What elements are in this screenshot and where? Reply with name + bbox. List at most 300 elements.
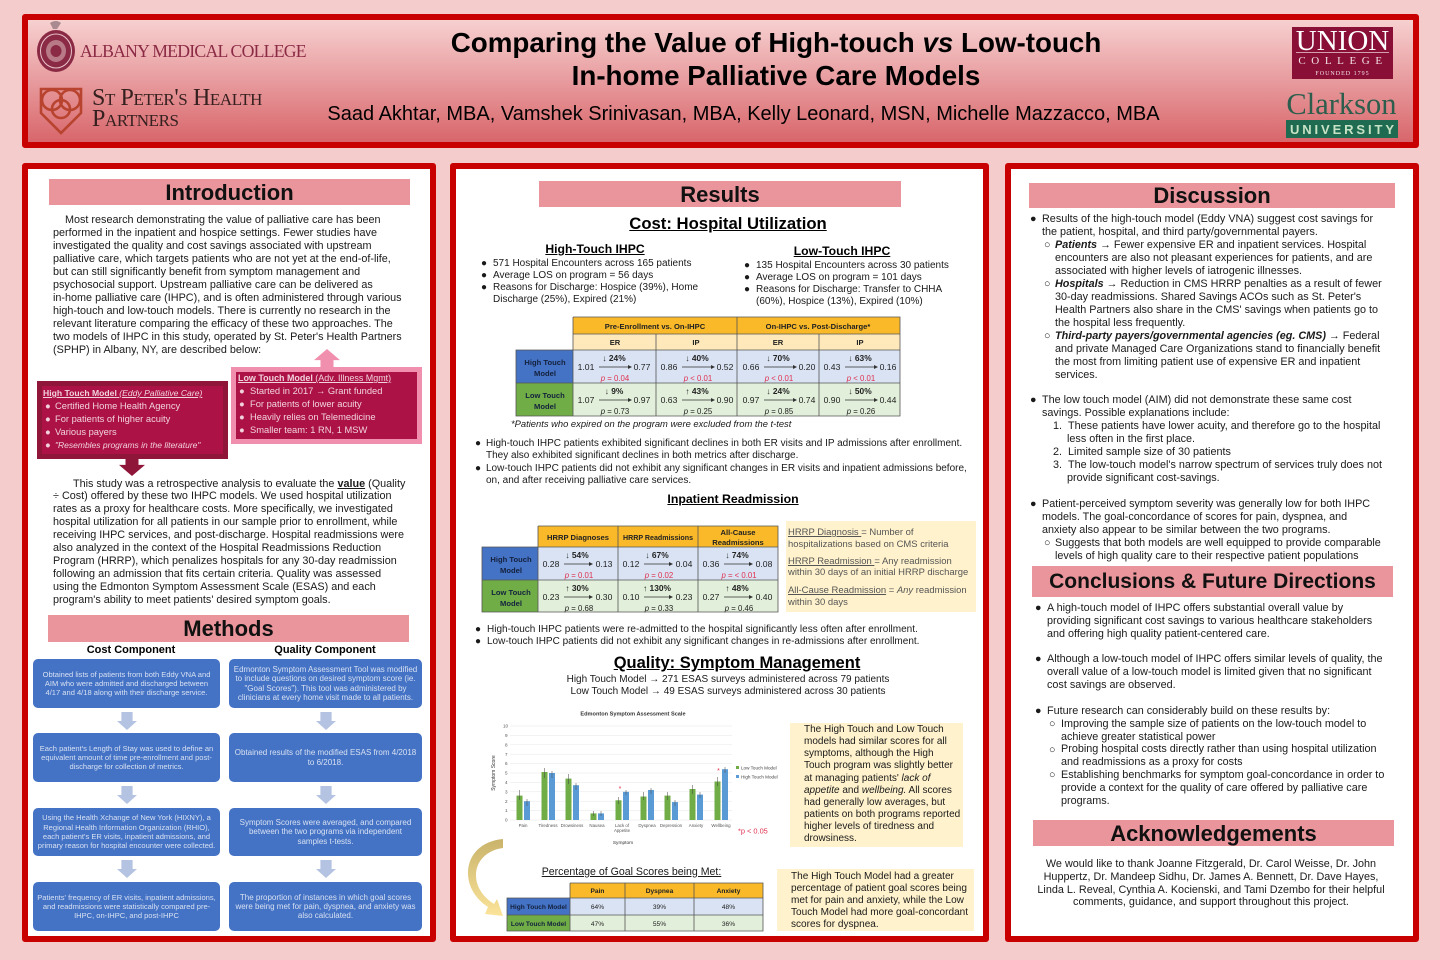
logo: Union College: FOUNDED 1795 [1315,71,1370,77]
subheading: high-touch IHPC: High-Touch IHPC [545,242,645,256]
flow step: quality 2 [229,733,422,782]
bullets: discussion of high-touch savings: the most from limiting patient use of expensive ER and inpatient [1055,356,1360,368]
heading: Introduction [49,179,410,205]
heading: Acknowledgements: Acknowledgements [1110,821,1317,846]
flow step: cost 2: Each patient's Length of Stay was used to define an [40,744,213,753]
heading: Methods: Methods [183,616,274,641]
table: hospital utilization [516,316,900,416]
text: introduction paragraph two [53,478,406,606]
logo: Albany Medical College [37,21,306,72]
bullets: low-touch explanations: The low touch model (AIM) did not demonstrate these same cost [1042,394,1352,406]
flow step: cost 2: equivalent amount of time pre-enrollment and post- [41,753,212,762]
arrow: quality 3 to 4 [316,860,336,878]
text: introduction paragraph one: relevant literature comparing the efficacy of these two approaches. The [53,318,393,330]
text: acknowledgements: We would like to thank Joanne Fitzgerald, Dr. Carol Weisse, Dr. John [1046,858,1376,870]
callout: symptom score interpretation: Touch program was slightly better [804,760,953,771]
callout: low touch model: ● [239,386,245,396]
bullets: discussion of high-touch savings: ● [1030,213,1037,225]
callout: readmission definitions: hospitalizations based on CMS criteria [788,538,949,550]
flow step: quality 3: between the two programs via independent [249,827,402,836]
table: readmissions: Low Touch [491,588,531,597]
callout: high touch model: "Resembles programs in the literature" [55,440,200,450]
text: acknowledgements: Linda L. Reveal, Cynthia A. Kocienski, and Tami Dzembo for their helpful [1037,884,1385,896]
bullets: low-touch value: Although a low-touch model of IHPC offers similar levels of quality, the [1047,653,1383,665]
table: goal scores met [506,882,764,932]
table: goal scores met: 48% [722,904,735,911]
table: readmissions: p = 0.46 [724,604,753,613]
text: introduction paragraph one: (SPHP) in Albany, NY, are described below: [53,344,261,356]
bullets: future research: ○ [1049,769,1056,781]
table: hospital utilization: ↓ 63% [848,353,872,363]
bullets: low-touch explanations: provide significant cost-savings. [1067,472,1220,484]
title [451,27,1101,91]
panel: results [450,163,989,942]
flow step: quality 1: "Goal Scores"). This tool was administered by [244,684,407,692]
bullets: discussion of high-touch savings: the hospital less frequently. [1055,317,1185,329]
arrow: quality 2 to 3 [316,786,336,804]
bullets: readmission findings: Low-touch IHPC patients did not exhibit any significant changes in re-admissions after enrollment. [487,636,919,647]
heading: Conclusions and Future Directions [1032,566,1393,597]
flow step: cost 2: discharge for collection of metrics. [69,762,184,771]
callout: low touch model: Smaller team: 1 RN, 1 MSW [250,425,367,435]
flow step: cost 1: Obtained lists of patients from both Eddy VNA and [43,670,210,679]
logo: St Peter's Health Partners: Partners [92,106,179,132]
bullets: high-touch facts [481,258,698,305]
callout: low touch model: For patients of lower acuity [250,399,362,409]
flow step: cost 4: Patients' frequency of ER visits, inpatient admissions, [37,893,216,902]
bar chart: Edmonton Symptom Assessment Scale: 5 [505,771,508,776]
bullets: symptom severity: levels of high quality care to their respective patient populations [1055,550,1359,562]
table: readmissions: 0.40 [756,592,773,602]
bullets: low-touch facts [744,260,949,307]
bullets: high-touch facts: Reasons for Discharge: Hospice (39%), Home [493,282,698,293]
table: goal scores met: Pain [591,888,604,895]
flow step: cost 3: primary reason for hospital encounter were collected. [38,841,215,850]
callout: high touch model: For patients of higher acuity [55,414,170,424]
table: hospital utilization: IP [856,338,864,347]
table: hospital utilization: 1.07 [578,395,595,405]
callout: low touch model: ● [239,399,245,409]
subheading: cost hospital utilization: Cost: Hospital Utilization [629,214,827,233]
bullets: utilization findings: on, and after receiving palliative care services. [486,475,691,486]
table: hospital utilization: ↓ 70% [766,353,790,363]
bullets: future research: and readmissions as a proxy for costs [1061,756,1242,768]
table: hospital utilization: ↓ 50% [848,386,872,396]
bullets: future research: provide a context for the quality of care offered by palliative care [1061,782,1367,794]
subheading: inpatient readmission: Inpatient Readmission [667,492,799,506]
bullets: symptom severity: anxiety also appear to be similar between the two programs. [1042,524,1330,536]
bar chart: Edmonton Symptom Assessment Scale: Depression [660,823,683,828]
logo: Union College [1292,25,1393,79]
callout: low touch model: Started in 2017 → Grant funded [250,386,382,396]
callout: readmission definitions: HRRP Readmission = Any readmission [788,556,952,566]
bar chart: Edmonton Symptom Assessment Scale: Edmonton Symptom Assessment Scale [580,712,686,718]
bullets: future research: Improving the sample size of patients on the low-touch model to [1061,718,1366,730]
table: goal scores met: 55% [653,921,666,928]
bullets: discussion of high-touch savings: Third-party payers/governmental agencies (eg. CMS) → Federal [1055,330,1379,342]
table: readmissions: 0.36 [703,559,720,569]
table: goal scores met: High Touch Model [510,904,567,911]
table: hospital utilization: 0.90 [824,395,841,405]
callout: high touch model: ● [45,440,51,450]
subheading: quality symptom management: Quality: Symptom Management [614,654,860,672]
text: ESAS survey counts [567,674,889,697]
bar chart: Edmonton Symptom Assessment Scale: * [619,786,622,793]
bullets: low-touch value [1035,653,1383,691]
bar chart: Edmonton Symptom Assessment Scale: 7 [505,752,508,757]
callout: readmission definitions: within 30 days [788,596,848,608]
panel: left column [22,163,436,942]
table: hospital utilization: ER [610,338,621,347]
table: readmissions: All-Cause [720,528,756,537]
table: hospital utilization: p < 0.01 [764,374,793,383]
table: readmissions: Model [500,599,522,608]
bullets: low-touch facts: (60%), Hospice (13%), Expired (10%) [756,296,923,307]
flow step: cost 3: each patient's ER visits, inpatient admissions, and [43,832,210,841]
table: hospital utilization: Model [534,402,556,411]
bar chart: Edmonton Symptom Assessment Scale: 4 [505,780,508,785]
header banner [22,14,1419,148]
heading: Methods [48,615,409,642]
note: t-test exclusion: *Patients who expired on the program were excluded from the t-test [511,418,791,429]
callout: readmission definitions: All-Cause Readmission = Any readmission [788,585,967,596]
text: ESAS survey counts: High Touch Model → 271 ESAS surveys administered across 79 patients [567,674,889,684]
flow step: cost 4 [33,882,220,931]
text: introduction paragraph one: two models of IHPC in this study, operated by St. Peter's Health Partners [53,330,402,342]
callout: symptom score interpretation: symptoms, although the High [804,748,934,759]
table: hospital utilization: 0.66 [743,362,760,372]
bar chart: Edmonton Symptom Assessment Scale: Tiredness [538,823,558,828]
callout: low touch model: Low Touch Model (Adv. Illness Mgmt) [238,373,391,383]
flow step: quality 1: clinicians at every home visit made to all patients. [238,693,413,702]
arrow: cost 3 to 4 [117,860,137,878]
table: hospital utilization: 0.43 [824,362,841,372]
bullets: future research: Establishing benchmarks for symptom goal-concordance in order to [1061,769,1384,781]
bullets: low-touch facts: 135 Hospital Encounters across 30 patients [756,260,949,271]
bullets: future research [1035,705,1384,807]
bar chart: Edmonton Symptom Assessment Scale: Low Touch Model [741,766,777,770]
bar chart: Edmonton Symptom Assessment Scale: Drowsiness [561,823,584,828]
bullets: conclusions: ● [1035,602,1042,614]
table: readmissions: ↑ 30% [565,583,589,593]
callout: goal score interpretation: percentage of patient goal scores being [791,883,967,894]
flow step: quality 4: The proportion of instances in which goal scores [240,893,411,902]
bullets: conclusions: providing significant cost savings to various healthcare stakeholders [1047,615,1372,627]
table: readmissions: ↑ 48% [725,583,749,593]
text: introduction paragraph two: rates as a proxy for healthcare costs. More specifically, we investigated [53,503,393,515]
bar chart: Edmonton Symptom Assessment Scale: 0 [505,818,508,823]
callout: symptom score interpretation: at managing patients' lack of [804,773,930,784]
bullets: future research: programs. [1061,795,1110,807]
logo: Clarkson University: UNIVERSITY [1290,122,1394,137]
text: introduction paragraph one: psychosocial support. Upstream palliative care can be delivered as [53,278,373,290]
callout: low touch model: Heavily relies on Telemedicine [250,412,376,422]
bar chart: Edmonton Symptom Assessment Scale [491,712,778,846]
callout: symptom score interpretation: The High Touch and Low Touch [804,724,944,735]
table: hospital utilization: On-IHPC vs. Post-Discharge* [766,322,870,331]
arrow: curved link from chart to goal table [468,839,503,916]
table: hospital utilization: 0.20 [799,362,816,372]
bar chart: Edmonton Symptom Assessment Scale: 10 [503,724,509,728]
logo: St Peter's Health Partners [40,85,262,135]
bar chart: Edmonton Symptom Assessment Scale: 6 [505,761,508,766]
table: hospital utilization: Pre-Enrollment vs. On-IHPC [605,322,706,331]
bullets: high-touch facts: Discharge (25%), Expired (21%) [493,294,636,305]
logo: St Peter's Health Partners: St Peter's Health [92,85,262,111]
bullets: discussion of high-touch savings: Hospitals → Reduction in CMS HRRP penalties as a result of fewer [1055,278,1382,290]
callout: symptom score interpretation: appetite and wellbeing. All scores [804,785,952,796]
callout: high touch model: Various payers [55,427,117,437]
table: hospital utilization: p = 0.26 [846,407,875,416]
table: hospital utilization: 0.97 [634,395,651,405]
callout: symptom score interpretation: had generally low averages, but [804,797,945,808]
text: introduction paragraph one: high-touch and low-touch models. There is currently no research in the [53,304,391,316]
subheading: quality component: Quality Component [274,644,376,656]
table: readmissions: 0.28 [543,559,560,569]
callout: high touch model: ● [45,414,51,424]
callout: symptom score interpretation: drowsiness. [804,833,857,844]
bullets: readmission findings: ● [475,624,481,635]
table: hospital utilization: p = 0.73 [600,407,629,416]
text: introduction paragraph two: following an admission that fits certain criteria. Quality was assessed [53,568,381,580]
table: hospital utilization: 0.90 [717,395,734,405]
heading: Results: Results [680,182,760,207]
bullets: low-touch explanations: less often in the first place. [1067,433,1195,445]
bullets: low-touch explanations: 3. The low-touch model's narrow spectrum of services truly does not [1053,459,1382,471]
table: hospital utilization: 0.77 [634,362,651,372]
heading: Introduction: Introduction [165,180,294,205]
bar chart: Edmonton Symptom Assessment Scale: Nausea [589,823,605,828]
bullets: symptom severity: Patient-perceived symptom severity was generally low for both IHPC [1042,498,1370,510]
table: readmissions: 0.12 [623,559,640,569]
bullets: high-touch facts: ● [481,270,487,281]
callout: low touch model: ● [239,412,245,422]
table: goal scores met: Low Touch Model [511,921,566,928]
table: hospital utilization: ↓ 24% [766,386,790,396]
callout: symptom score interpretation: models had similar scores for all [804,736,947,747]
logo: Union College: COLLEGE [1298,55,1388,67]
table: readmissions: HRRP Readmissions [623,534,693,542]
bullets: discussion of high-touch savings: the patient, hospital, and third party/governmental payers. [1042,226,1318,238]
table: readmissions [482,526,778,613]
bullets: conclusions: A high-touch model of IHPC offers substantial overall value by [1047,602,1343,614]
bullets: utilization findings: Low-touch IHPC patients did not exhibit any significant changes in ER visits and inpatient admissions before, [486,463,967,474]
table: readmissions: 0.13 [596,559,613,569]
flow step: cost 3: Regional Health Information Organization (RHIO), [43,823,210,832]
subheading: cost component: Cost Component [87,644,175,656]
table: readmissions: p = 0.01 [564,571,593,580]
table: hospital utilization: High Touch [524,358,566,367]
bullets: low-touch value: ● [1035,653,1042,665]
bullets: high-touch facts: 571 Hospital Encounters across 165 patients [493,258,691,268]
flow step: cost 4: and readmissions were statistically compared pre- [43,902,210,911]
table: hospital utilization: p = 0.25 [683,407,713,416]
bullets: utilization findings [475,438,967,486]
text: introduction paragraph one: in-home palliative care (IHPC), and is often administered through various [53,292,402,304]
flow step: quality 1: Edmonton Symptom Assessment Tool was modified [234,665,417,674]
table: hospital utilization: 0.16 [880,362,897,372]
bar chart: Edmonton Symptom Assessment Scale: Pain [519,823,528,828]
table: readmissions: 0.10 [623,592,640,602]
bullets: symptom severity: Suggests that both models are well equipped to provide comparable [1055,537,1381,549]
table: hospital utilization: ↓ 24% [602,353,626,363]
flow step: quality 2: to 6/2018. [308,758,343,766]
text: introduction paragraph two: program's ability to meet patients' desired symptom goals. [53,594,331,606]
text: introduction paragraph one: Most research demonstrating the value of palliative care has been [65,214,381,226]
table: hospital utilization: 0.44 [880,395,897,405]
table: readmissions: High Touch [490,555,532,564]
logo: Albany Medical College: ALBANY MEDICAL COLLEGE [80,41,306,61]
table: hospital utilization: 0.63 [661,395,678,405]
callout: goal score interpretation: scores for dyspnea. [791,919,879,930]
table: readmissions: Model [500,566,522,575]
text: introduction paragraph two: receiving IHPC services, and post-discharge. Hospital readmissions were [53,529,404,541]
table: readmissions: p = < 0.01 [720,571,757,580]
bullets: low-touch facts: ● [744,260,750,271]
bullets: low-touch facts: ● [744,272,750,283]
text: introduction paragraph two: Program (HRRP), which penalizes hospitals for any 30-day readmission [53,555,397,567]
flow step: quality 4: also calculated. [298,911,353,920]
bullets: readmission findings [475,624,919,647]
callout: symptom score interpretation: higher levels of tiredness and [804,821,934,832]
callout: goal score interpretation: The High Touch Model had a greater [791,870,954,882]
text: introduction paragraph one: palliative care, which targets patients who are not yet at the end-of-life, [53,252,391,264]
bullets: discussion of high-touch savings: Health Partners also share in the CMS' savings when patients go to [1055,304,1378,316]
table: readmissions: 0.04 [676,559,693,569]
bullets: low-touch explanations: savings. Possible explanations include: [1042,407,1230,419]
arrow: low touch up [314,349,340,367]
table: readmissions: 0.23 [543,592,560,602]
table: readmissions: 0.23 [676,592,693,602]
table: readmissions: HRRP Diagnoses [547,533,609,542]
table: goal scores met: 64% [591,904,604,911]
bullets: high-touch facts: ● [481,282,487,293]
callout: goal score interpretation: Touch Model had more goal-concordant [791,907,968,918]
table: hospital utilization: 0.52 [717,362,734,372]
heading: Conclusions and Future Directions: Conclusions & Future Directions [1049,570,1376,593]
text: acknowledgements: comments, guidance, and support throughout this project. [1073,896,1349,908]
callout: high touch model: Certified Home Health Agency [55,401,180,411]
table: goal scores met: 36% [722,921,735,928]
bullets: discussion of high-touch savings: associated with higher levels of iatrogenic illnesses. [1055,265,1302,277]
bullets: utilization findings: High-touch IHPC patients exhibited significant declines in both ER visits and IP admissions after enrollment. [486,438,962,449]
table: readmissions: ↓ 54% [565,550,589,560]
callout: high touch model: ● [45,401,51,411]
bullets: readmission findings: ● [475,636,481,647]
text: introduction paragraph one: performed in the inpatient and hospice settings. Fewer studies have [53,226,377,238]
bar chart: Edmonton Symptom Assessment Scale: Symptom [613,840,633,846]
logo: Clarkson University [1286,87,1398,138]
table: readmissions: ↓ 74% [725,550,749,560]
text: introduction paragraph one: but can still significantly benefit from symptom management and [53,266,360,278]
table: hospital utilization: ↓ 9% [605,386,624,396]
bullets: conclusions [1035,602,1372,640]
authors: Saad Akhtar, MBA, Vamshek Srinivasan, MBA, Kelly Leonard, MSN, Michelle Mazzacco, MBA [327,102,1160,124]
bar chart: Edmonton Symptom Assessment Scale: 9 [505,733,508,738]
callout: symptom score interpretation [790,723,963,847]
callout: readmission definitions [786,521,976,612]
table: hospital utilization: 0.97 [743,395,760,405]
bar chart: Edmonton Symptom Assessment Scale: *p < 0.05 [738,826,768,836]
text: acknowledgements: Huppertz, Dr. Mandeep Sidhu, Dr. James A. Bennett, Dr. Dave Hayes, [1044,871,1378,883]
table: hospital utilization: Low Touch [525,391,565,400]
bullets: low-touch explanations: 2. Limited sample size of 30 patients [1053,446,1231,458]
table: goal scores met: 47% [591,921,604,928]
bar chart: Edmonton Symptom Assessment Scale: 3 [505,789,508,794]
title: In-home Palliative Care Models [572,60,980,91]
bullets: low-touch value: overall value of a low-touch model is limited given that no significant [1047,666,1372,678]
callout: low touch model [231,367,422,444]
bar chart: Edmonton Symptom Assessment Scale: Dyspnea [638,823,656,828]
callout: readmission definitions: HRRP Diagnosis = Number of [788,527,913,538]
table: readmissions: p = 0.02 [644,571,673,580]
flow step: quality 1 [229,659,422,708]
table: readmissions: Readmissions [712,538,764,547]
table: readmissions: p = 0.68 [564,604,593,613]
flow step: quality 3: samples t-tests. [297,837,354,846]
flow step: quality 4: were being met for pain, dyspnea, and anxiety was [235,902,416,911]
bar chart: Edmonton Symptom Assessment Scale: 1 [505,808,508,813]
callout: readmission definitions: within 30 days of an initial HRRP discharge [788,567,968,578]
text: introduction paragraph one [53,214,402,356]
callout: high touch model: ● [45,427,51,437]
logo: Clarkson University: Clarkson [1286,87,1397,121]
subheading: percentage of goal scores: Percentage of Goal Scores being Met: [542,866,721,878]
callout: low touch model: ● [239,425,245,435]
table: readmissions: ↑ 130% [643,583,672,593]
subheading: low-touch IHPC: Low-Touch IHPC [794,244,890,258]
bullets: utilization findings: ● [475,463,481,474]
bar chart: Edmonton Symptom Assessment Scale: * [717,768,720,775]
bar chart: Edmonton Symptom Assessment Scale: Symptom Score [491,755,497,791]
bullets: discussion of high-touch savings: 30-day readmissions. Shared Savings ACOs such as St. Peter's [1055,291,1361,303]
text: acknowledgements [1037,858,1385,908]
bullets: low-touch facts: Reasons for Discharge: Transfer to CHHA [756,284,942,295]
arrow: cost 1 to 2 [117,712,137,730]
bullets: discussion of high-touch savings: ○ [1044,278,1051,290]
heading: Results [539,181,901,207]
flow step: cost 1: 4/17 and 4/18 along with their discharge service. [46,688,207,697]
bullets: future research: Probing hospital costs directly rather than using hospital utilization [1061,743,1377,755]
text: introduction paragraph two: also analyzed in the context of the Hospital Readmissions Reduction [53,542,381,554]
bullets: discussion of high-touch savings: Patients → Fewer expensive ER and inpatient services. Hospital [1055,239,1366,251]
text: ESAS survey counts: Low Touch Model → 49 ESAS surveys administered across 30 patients [571,686,885,697]
arrow: quality 1 to 2 [316,712,336,730]
table: hospital utilization: ↑ 43% [685,386,709,396]
heading: Discussion: Discussion [1153,183,1271,208]
bullets: conclusions: and offering high quality patient-centered care. [1047,628,1270,640]
flow step: quality 4 [229,882,422,931]
table: hospital utilization: ↓ 40% [685,353,709,363]
text: introduction paragraph two: This study was a retrospective analysis to evaluate the value (Quality [73,478,405,490]
callout: high touch model: High Touch Model (Eddy Palliative Care) [43,388,202,398]
panel: right column [1005,163,1419,942]
bullets: symptom severity: models. The goal-concordance of scores for pain, dyspnea, and [1042,511,1347,523]
text: high-touch IHPC summary [481,242,698,305]
flow step: cost 4: IHPC, on-IHPC, and post-IHPC [74,911,179,920]
bullets: future research: ○ [1049,744,1056,756]
table: goal scores met: Anxiety [717,888,741,895]
flow step: cost 3 [33,808,220,856]
bullets: future research: Future research can considerably build on these results by: [1047,705,1330,717]
bullets: utilization findings: ● [475,438,481,449]
table: hospital utilization: ER [773,338,784,347]
bullets: low-touch facts: ● [744,284,750,295]
table: hospital utilization: p = 0.85 [764,407,794,416]
heading: Discussion [1029,183,1395,208]
table: hospital utilization: 1.01 [578,362,595,372]
bullets: discussion of high-touch savings: services. [1055,369,1098,381]
